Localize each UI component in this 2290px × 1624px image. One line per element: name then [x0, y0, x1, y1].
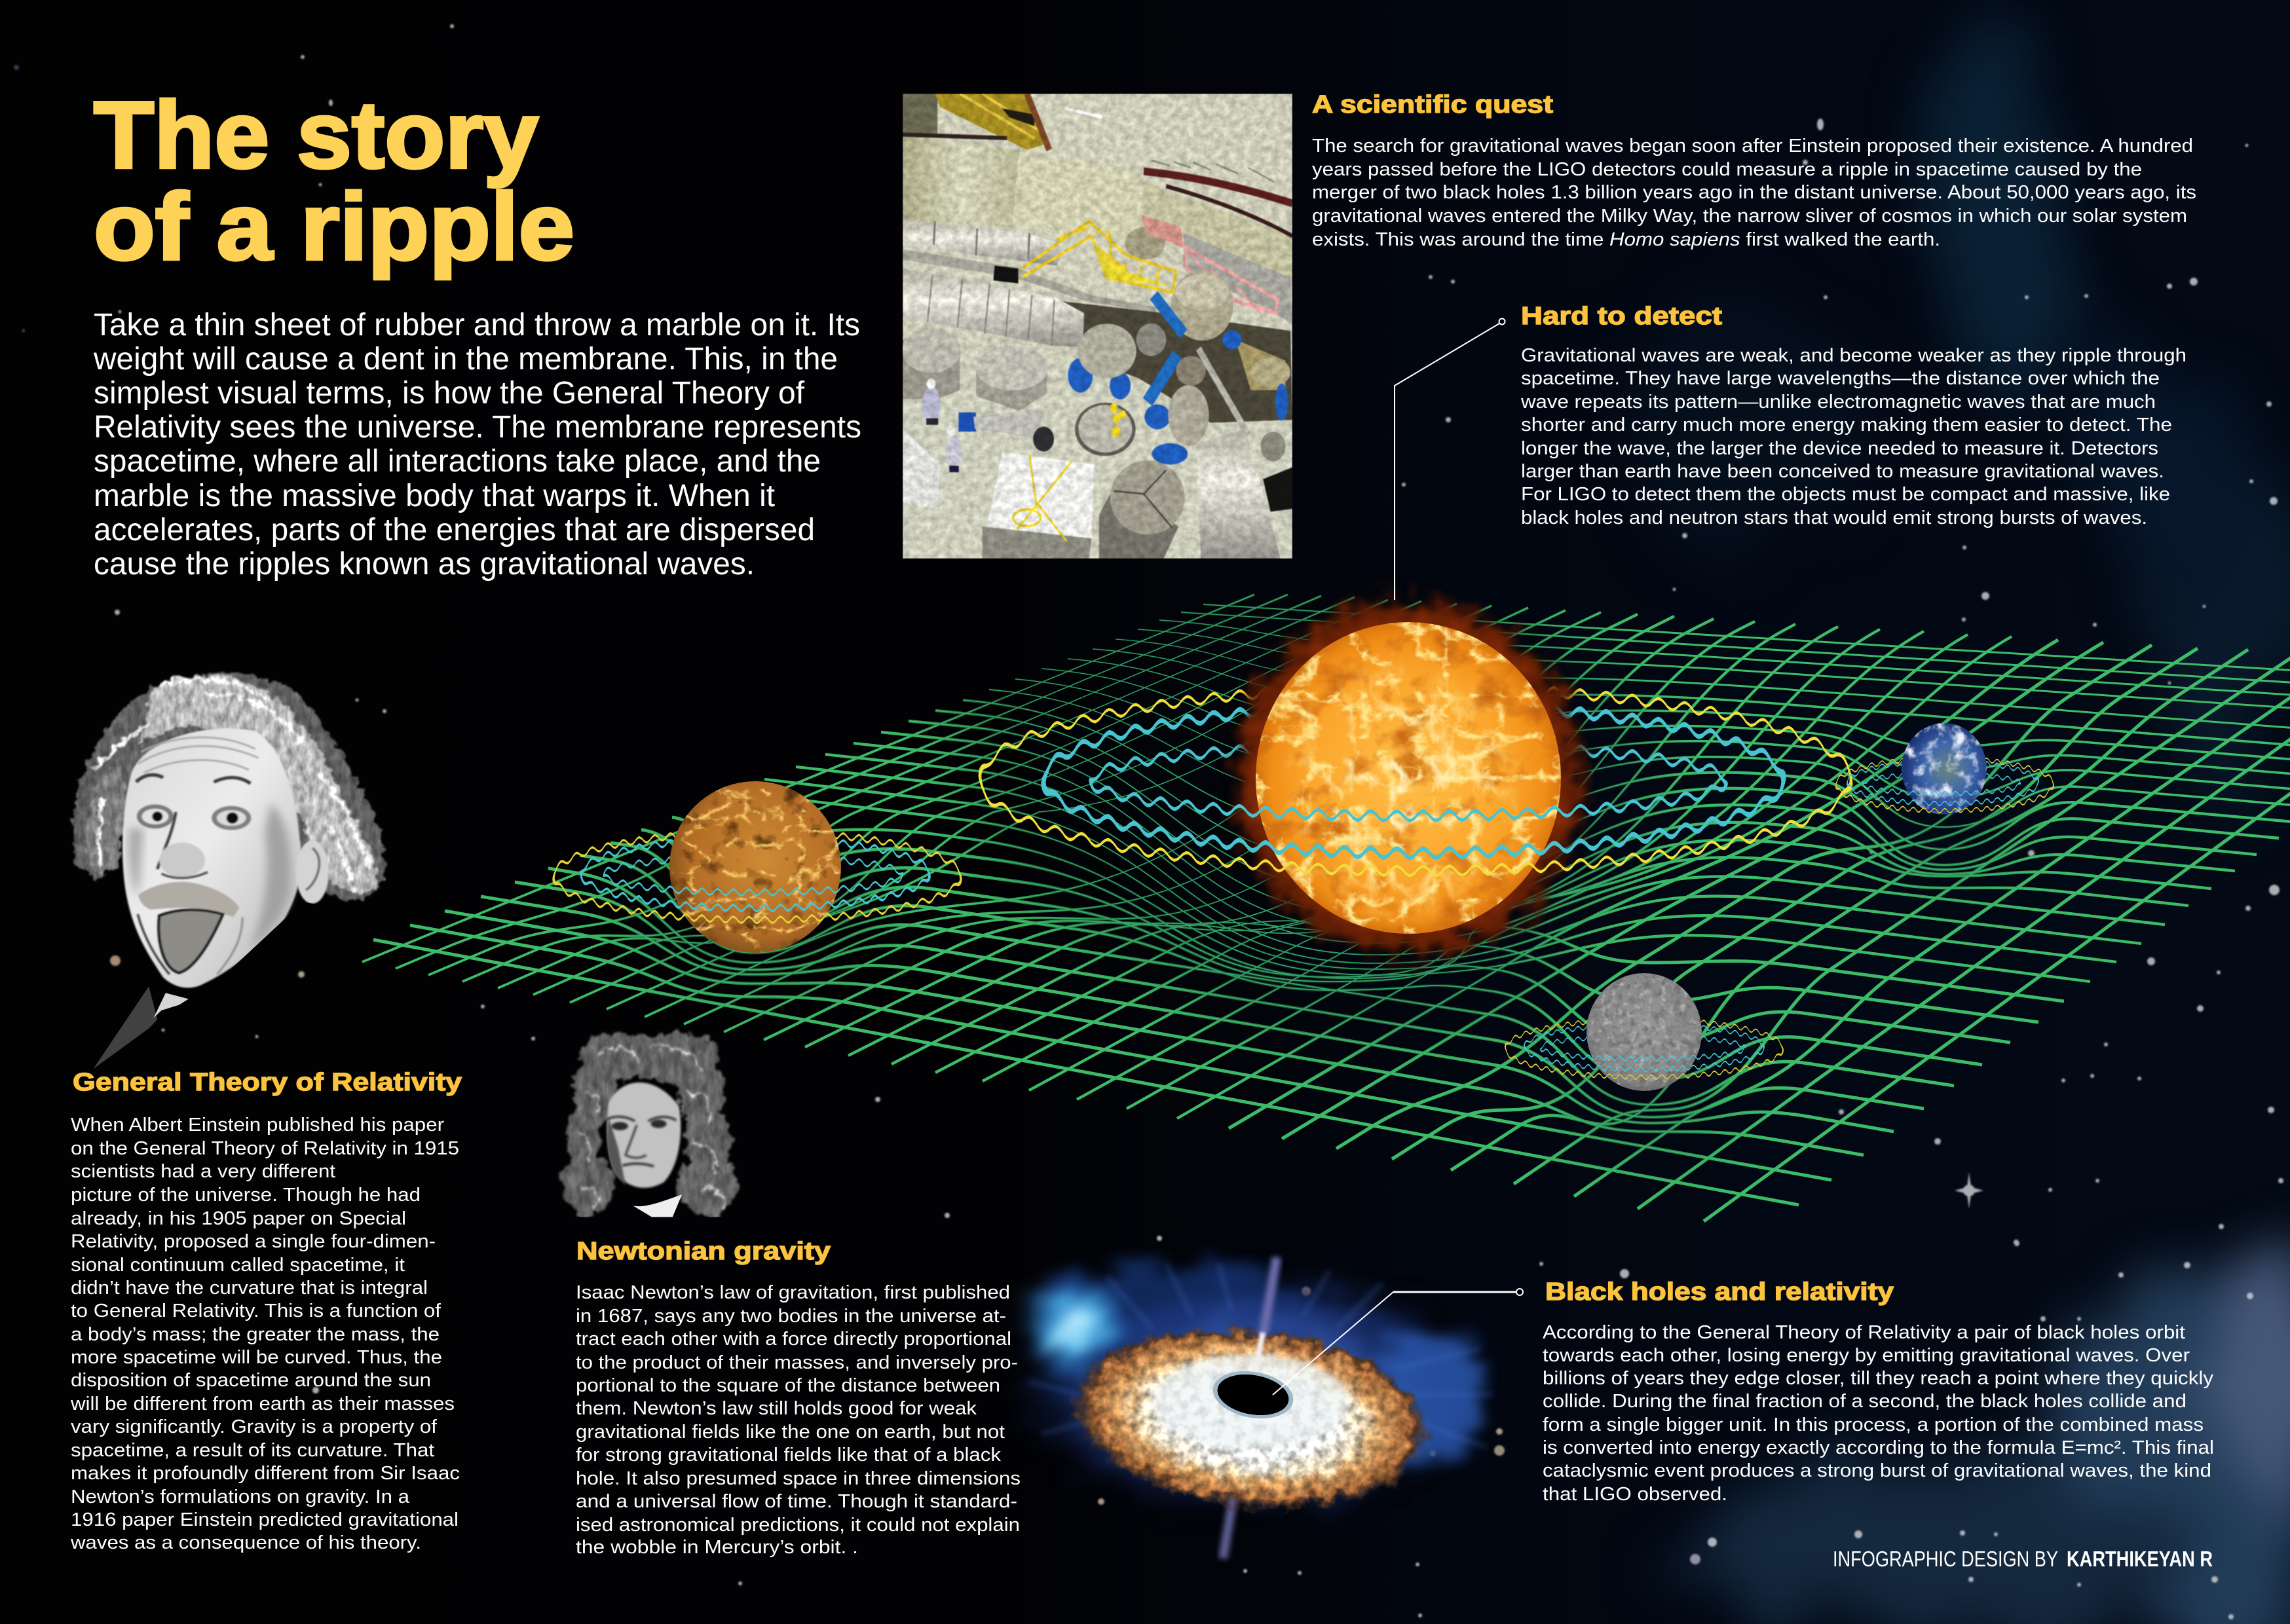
wave rings behind venus	[554, 832, 961, 920]
credit: INFOGRAPHIC DESIGN BY	[1833, 1547, 2058, 1571]
text block: introduction: Take a thin sheet of rubber and throw a marble on it. Its	[94, 308, 860, 342]
text block: newtonian gravity body: them. Newton’s law still holds good for weak	[576, 1398, 977, 1419]
icon: venus	[669, 781, 841, 953]
text block: newtonian gravity body: Isaac Newton’s law of gravitation, first published	[576, 1282, 1010, 1303]
text block: general relativity body: to General Relativity. This is a function of	[71, 1301, 441, 1321]
icon: sun with corona	[1222, 585, 1595, 968]
text block: introduction: spacetime, where all interactions take place, and the	[94, 444, 821, 479]
text block: a scientific quest body: years passed before the LIGO detectors could measure a ripple in spacetime caused by the	[1312, 159, 2142, 180]
text block: general relativity body: disposition of spacetime around the sun	[71, 1370, 431, 1391]
text block: general relativity body: sional continuum called spacetime, it	[71, 1255, 405, 1276]
text block: general relativity body: picture of the universe. Though he had	[71, 1185, 421, 1206]
text block: newtonian gravity body: to the product of their masses, and inversely pro-	[576, 1352, 1018, 1373]
text block: newtonian gravity body: gravitational fields like the one on earth, but not	[576, 1422, 1005, 1443]
text block: introduction: marble is the massive body that warps it. When it	[94, 479, 775, 513]
text block: hard to detect body: For LIGO to detect them the objects must be compact and massive, like	[1521, 484, 2170, 505]
text block: introduction: accelerates, parts of the energies that are dispersed	[94, 513, 815, 547]
text block: hard to detect body	[1520, 345, 2187, 528]
heading: black holes and relativity: Black holes and relativity	[1545, 1278, 1894, 1306]
panel: a scientific quest	[1312, 91, 2196, 250]
text block: general relativity body: spacetime, a result of its curvature. That	[71, 1440, 434, 1461]
text block: a scientific quest body: gravitational waves entered the Milky Way, the narrow sliver of cosmos in which our solar system	[1312, 206, 2187, 227]
text block: general relativity body: scientists had a very different	[71, 1161, 335, 1182]
text block: general relativity body: a body’s mass; the greater the mass, the	[71, 1324, 440, 1345]
text block: general relativity body: vary significantly. Gravity is a property of	[71, 1416, 438, 1437]
text block: newtonian gravity body: hole. It also presumed space in three dimensions	[576, 1468, 1021, 1489]
text block: general relativity body: will be different from earth as their masses	[70, 1393, 455, 1414]
title: of a ripple	[94, 174, 574, 280]
text block: introduction: simplest visual terms, is how the General Theory of	[94, 376, 805, 411]
text block: newtonian gravity body: tract each other with a force directly proportional	[576, 1329, 1011, 1350]
text block: hard to detect body: wave repeats its pattern—unlike electromagnetic waves that are much	[1520, 392, 2156, 413]
text block: general relativity body: 1916 paper Einstein predicted gravitational	[71, 1509, 459, 1530]
text block: hard to detect body: larger than earth have been conceived to measure gravitational waves.	[1521, 461, 2164, 482]
heading: hard to detect: Hard to detect	[1521, 303, 1722, 330]
wave rings behind the sun	[980, 688, 1851, 871]
image: LIGO detector hall	[902, 94, 1292, 559]
text block: newtonian gravity body: portional to the square of the distance between	[576, 1375, 1000, 1396]
wave rings in front of planets	[554, 779, 2054, 1077]
chart: warped spacetime grid (dim lines inside gravity wells)	[362, 595, 2290, 1221]
text block: black holes body: is converted into energy exactly according to the formula E=mc². This final	[1543, 1437, 2214, 1458]
text block: newtonian gravity body: and a universal flow of time. Though it standard-	[576, 1491, 1017, 1512]
text block: newtonian gravity body	[576, 1282, 1021, 1558]
portrait: Newton	[561, 1031, 738, 1217]
wave rings behind earth and mercury	[1505, 758, 2054, 1077]
text block: general relativity body: more spacetime will be curved. Thus, the	[71, 1347, 442, 1368]
text block: black holes body: According to the General Theory of Relativity a pair of black holes orbit	[1543, 1322, 2185, 1343]
collar and tie	[153, 993, 189, 1018]
portrait: Einstein	[73, 673, 395, 1092]
text block: black holes body: collide. During the final fraction of a second, the black holes collide and	[1543, 1391, 2187, 1412]
text block: general relativity body: Relativity, proposed a single four-dimen-	[71, 1231, 436, 1252]
illustration: black hole	[1000, 1255, 1493, 1559]
text block: a scientific quest body	[1312, 136, 2196, 250]
text block: black holes body: form a single bigger unit. In this process, a portion of the combined mass	[1543, 1414, 2204, 1435]
icon: earth	[1902, 723, 1987, 815]
text block: general relativity body: already, in his 1905 paper on Special	[71, 1208, 406, 1229]
chart: spacetime grid bright lines	[362, 595, 2290, 1221]
text block: introduction: Relativity sees the universe. The membrane represents	[94, 410, 861, 445]
text block: introduction: cause the ripples known as gravitational waves.	[94, 547, 755, 581]
text block: general relativity body: makes it profoundly different from Sir Isaac	[71, 1463, 460, 1484]
arrow: callout line from black hole to heading	[1273, 1289, 1523, 1395]
text block: newtonian gravity body: the wobble in Mercury’s orbit. .	[576, 1537, 858, 1558]
title: The story	[94, 82, 538, 188]
text block: general relativity body: Newton’s formulations on gravity. In a	[71, 1486, 410, 1507]
panel: newtonian gravity	[576, 1238, 1021, 1558]
text block: general relativity body: on the General Theory of Relativity in 1915	[71, 1138, 459, 1159]
heading: newtonian gravity: Newtonian gravity	[576, 1238, 831, 1265]
text block: general relativity body: waves as a consequence of his theory.	[70, 1532, 421, 1553]
jacket	[96, 899, 395, 1092]
text block: general relativity body: When Albert Einstein published his paper	[71, 1115, 444, 1135]
heading: general theory of relativity: General Theory of Relativity	[73, 1069, 462, 1096]
text block: hard to detect body: shorter and carry much more energy making them easier to detect. The	[1521, 415, 2172, 435]
text block: newtonian gravity body: in 1687, says any two bodies in the universe at-	[576, 1306, 1006, 1327]
panel: hard to detect	[1520, 303, 2187, 528]
panel: general theory of relativity	[70, 1069, 462, 1553]
text block: hard to detect body: longer the wave, the larger the device needed to measure it. Detectors	[1521, 438, 2158, 459]
text block: introduction: weight will cause a dent in the membrane. This, in the	[93, 342, 838, 377]
text block: black holes body: that LIGO observed.	[1543, 1484, 1727, 1505]
text block: a scientific quest body: exists. This was around the time Homo sapiens first walked the earth.	[1312, 229, 1940, 250]
text block: introduction	[93, 308, 861, 581]
title	[94, 82, 574, 280]
credit: KARTHIKEYAN R	[2067, 1547, 2213, 1571]
text block: hard to detect body: spacetime. They have large wavelengths—the distance over which the	[1521, 368, 2160, 389]
text block: general relativity body	[70, 1115, 460, 1553]
text block: a scientific quest body: The search for gravitational waves began soon after Einstein proposed their existence. A hundred	[1312, 136, 2193, 157]
text block: general relativity body: didn’t have the curvature that is integral	[71, 1278, 428, 1299]
text block: hard to detect body: Gravitational waves are weak, and become weaker as they ripple through	[1521, 345, 2187, 366]
lapel	[93, 986, 157, 1069]
text block: a scientific quest body: merger of two black holes 1.3 billion years ago in the distant universe. About 50,000 years ago, its	[1312, 182, 2196, 203]
text block: newtonian gravity body: ised astronomical predictions, it could not explain	[576, 1515, 1020, 1536]
text block: black holes body: billions of years they edge closer, till they reach a point where they quickly	[1543, 1368, 2214, 1389]
panel: black holes and relativity	[1543, 1278, 2214, 1505]
heading: a scientific quest: A scientific quest	[1312, 91, 1553, 119]
icon: mercury	[1586, 973, 1702, 1091]
text block: hard to detect body: black holes and neutron stars that would emit strong bursts of waves.	[1521, 507, 2147, 528]
text block: black holes body: towards each other, losing energy by emitting gravitational waves. Over	[1543, 1345, 2190, 1366]
text block: black holes body	[1543, 1322, 2214, 1505]
arrow: callout line from sun to hard to detect	[1395, 318, 1505, 600]
text block: black holes body: cataclysmic event produces a strong burst of gravitational waves, the kind	[1543, 1460, 2211, 1481]
text block: newtonian gravity body: for strong gravitational fields like that of a black	[576, 1445, 1002, 1466]
